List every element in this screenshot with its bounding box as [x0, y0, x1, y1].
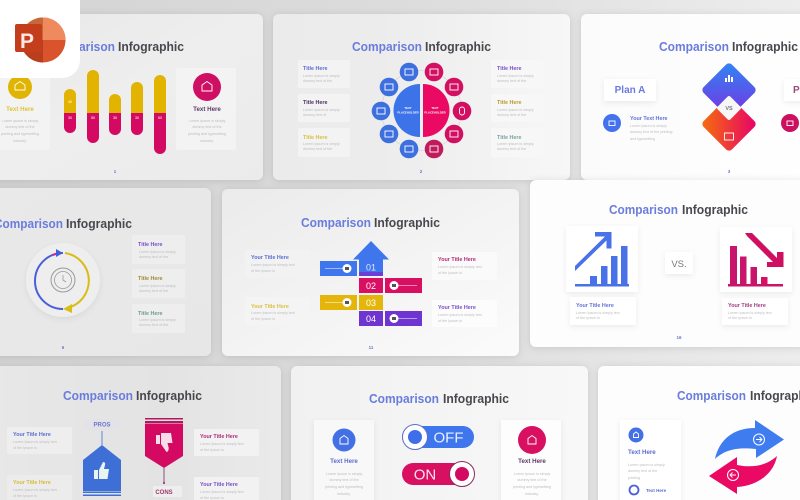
numbered arrow blocks [353, 241, 389, 326]
panel: slide 3 plan A versus plan B: Comparison [659, 39, 729, 54]
right card: Text Here [518, 458, 546, 465]
panel: slide 3 plan A versus plan B [581, 14, 800, 180]
bar chart [64, 70, 166, 154]
left text cards: Title Here [303, 66, 327, 72]
plan A text [603, 114, 672, 141]
left text cards: Your Title Here [13, 480, 51, 486]
central comparison circle: PLACEHOLDER [397, 110, 419, 114]
bar chart: 30 [113, 116, 117, 120]
left card: dummy text of the [329, 478, 359, 482]
bar chart: 30 [68, 116, 72, 120]
left text cards: dummy text of the [303, 147, 332, 151]
numbered arrow blocks: 02 [366, 281, 376, 291]
left text cards: Lorem Ipsum is simply text [251, 263, 295, 267]
central comparison circle: TEXT [404, 106, 412, 110]
left card: industry. [337, 492, 351, 496]
panel: slide on off toggles [291, 366, 588, 500]
side card: Text Here [646, 488, 667, 493]
plan A label [604, 79, 656, 101]
plan A text: and typesetting [630, 137, 655, 141]
left card: printing and typesetting [325, 485, 363, 489]
left card: Text Here [330, 458, 358, 465]
panel: slide pros and cons: Infographic [136, 388, 202, 403]
VS label: VS. [671, 259, 687, 270]
bar chart: 30 [135, 116, 139, 120]
icon: PowerPoint badge: P [20, 30, 34, 53]
caption cards: Your Title Here [576, 303, 614, 309]
central comparison circle [382, 70, 462, 150]
panel: slide 1 bars: 1 [114, 169, 117, 174]
panel: slide 2 circle comparison: Infographic [425, 39, 491, 54]
right text cards: dummy text of the [497, 113, 526, 117]
toggle on: ON [414, 466, 436, 484]
left card: Text Here [6, 106, 34, 113]
left card: dummy text of the [5, 125, 35, 129]
right text cards: of the Ipsum is [438, 319, 462, 323]
plan A label: Plan A [615, 85, 645, 96]
caption cards: of the Ipsum is [576, 316, 600, 320]
toggle off [402, 424, 474, 450]
panel: slide on off toggles: Comparison [369, 391, 439, 406]
left text cards: Lorem Ipsum is simply [303, 108, 340, 112]
text cards: dummy text of the [139, 289, 168, 293]
left text cards: of the Ipsum is [251, 269, 275, 273]
panel: slide 16 growth versus decline [530, 180, 800, 347]
panel: slide 16 growth versus decline: Infographic [682, 202, 748, 217]
right text cards: Lorem Ipsum is simply [497, 142, 534, 146]
right text cards: Lorem Ipsum is simply text [200, 442, 244, 446]
left card [0, 68, 50, 150]
left text cards: Lorem Ipsum is simply text [251, 311, 295, 315]
left card: Lorem Ipsum is simply [2, 119, 38, 123]
left text cards: dummy text of the [303, 79, 332, 83]
panel: slide 1 bars [0, 14, 263, 180]
text cards: Title Here [138, 276, 162, 282]
right card: industry. [525, 492, 539, 496]
text cards: Title Here [138, 242, 162, 248]
right text cards: Lorem Ipsum is simply text [200, 490, 244, 494]
panel: slide 6 clock cycle [0, 188, 211, 356]
bar chart: 60 [158, 116, 162, 120]
panel: slide 11 numbered arrow: Comparison [301, 215, 371, 230]
text cards [132, 235, 185, 333]
text cards: Lorem Ipsum is simply [139, 284, 176, 288]
pros tag [83, 419, 121, 496]
caption cards: Lorem Ipsum is simply text [576, 311, 620, 315]
right text cards: of the Ipsum is [200, 448, 224, 452]
toggle on [402, 462, 474, 486]
panel: slide 11 numbered arrow: Infographic [374, 215, 440, 230]
bar chart: 40 [68, 100, 72, 104]
panel: slide pros and cons [0, 366, 281, 500]
central comparison circle: PLACEHOLDER [424, 110, 446, 114]
plan B label: P [793, 85, 800, 96]
right card: printing and typesetting [513, 485, 551, 489]
left card [314, 420, 374, 500]
panel: slide 3 plan A versus plan B: 3 [728, 169, 731, 174]
text cards: Lorem Ipsum is simply [139, 318, 176, 322]
right text cards: Title Here [497, 66, 521, 72]
caption cards: of the Ipsum is [728, 316, 752, 320]
side card [620, 420, 681, 500]
panel: slide swap arrows [598, 366, 800, 500]
panel: slide swap arrows: Comparison [677, 388, 746, 403]
right card [176, 68, 236, 150]
caption cards: Your Title Here [728, 303, 766, 309]
diamonds: VS [725, 106, 733, 112]
right card: dummy text of the [517, 478, 547, 482]
plan B label [781, 79, 800, 132]
right card: Lorem Ipsum is simply [189, 119, 225, 123]
left text cards: Title Here [303, 100, 327, 106]
left card: printing and typesetting [1, 132, 39, 136]
right text cards: Your Title Here [438, 257, 476, 263]
left text cards: Lorem Ipsum is simply text [13, 488, 57, 492]
right card: printing and typesetting [188, 132, 226, 136]
panel: slide 2 circle comparison: 2 [420, 169, 423, 174]
caption cards: Lorem Ipsum is simply text [728, 311, 772, 315]
panel: slide 6 clock cycle: 6 [62, 345, 65, 350]
panel: slide 2 circle comparison [273, 14, 570, 180]
toggle off: OFF [434, 430, 464, 446]
right text cards [491, 60, 544, 157]
right text cards: Lorem Ipsum is simply text [438, 265, 482, 269]
left text cards: Your Title Here [251, 304, 289, 310]
panel: slide pros and cons: Comparison [63, 388, 133, 403]
panel: slide 1 bars: Comparison [45, 39, 115, 54]
numbered arrow blocks: 03 [366, 298, 376, 308]
right text cards: Lorem Ipsum is simply [497, 108, 534, 112]
side card: Text Here [628, 449, 656, 456]
panel: slide 11 numbered arrow [222, 189, 519, 356]
left card: Lorem Ipsum is simply [326, 472, 362, 476]
panel: slide 6 clock cycle: Infographic [66, 216, 132, 231]
panel: slide 1 bars: Infographic [118, 39, 184, 54]
side card: dummy text of the [628, 469, 657, 473]
left card: industry. [13, 139, 27, 143]
icon: thumbs down [156, 433, 172, 452]
left text cards: Lorem Ipsum is simply [303, 74, 340, 78]
plan A text: Lorem Ipsum is simply [630, 124, 667, 128]
left text cards [298, 60, 350, 157]
icon: PowerPoint badge [0, 0, 80, 78]
diamonds [701, 62, 757, 152]
left text cards: Lorem Ipsum is simply [303, 142, 340, 146]
text cards: Title Here [138, 311, 162, 317]
right text cards: Title Here [497, 135, 521, 141]
numbered arrow blocks: 01 [366, 262, 376, 272]
right text cards: Title Here [497, 100, 521, 106]
right text cards: of the Ipsum is [438, 271, 462, 275]
right card: dummy text of the [192, 125, 222, 129]
left text cards: of the Ipsum is [13, 494, 37, 498]
rising chart card [566, 226, 638, 292]
cons tag [145, 418, 183, 497]
left text cards [245, 250, 310, 325]
left text cards: of the Ipsum is [251, 317, 275, 321]
plan A text: Your Text Here [630, 116, 668, 122]
left text cards: Your Title Here [13, 432, 51, 438]
text cards: dummy text of the [139, 255, 168, 259]
left text cards: Title Here [303, 135, 327, 141]
panel: slide 16 growth versus decline: 16 [676, 335, 682, 340]
panel: slide on off toggles: Infographic [443, 391, 509, 406]
left text cards: Lorem Ipsum is simply text [13, 440, 57, 444]
cycle diagram [26, 243, 100, 317]
left text cards [7, 427, 72, 500]
panel: slide 2 circle comparison: Comparison [352, 39, 422, 54]
right text cards: Your Title Here [438, 305, 476, 311]
panel: slide 16 growth versus decline: Comparison [609, 202, 678, 217]
right card: industry. [200, 139, 214, 143]
side card: Lorem Ipsum is simply [628, 463, 665, 467]
right card: Lorem Ipsum is simply [514, 472, 550, 476]
side card: printing [628, 476, 640, 480]
right text cards: dummy text of the [497, 79, 526, 83]
central comparison circle: TEXT [431, 106, 439, 110]
numbered arrow blocks: 04 [366, 314, 376, 324]
right text cards: Your Title Here [200, 482, 238, 488]
text cards: dummy text of the [139, 323, 168, 327]
falling chart card [720, 227, 792, 292]
left text cards: Your Title Here [251, 255, 289, 261]
left text cards: of the Ipsum is [13, 446, 37, 450]
bar chart: 50 [91, 116, 95, 120]
right card: Text Here [193, 106, 221, 113]
right text cards: dummy text of the [497, 147, 526, 151]
plan A text: dummy text of the printing [630, 130, 672, 134]
icon: thumbs up [94, 462, 109, 479]
right text cards: Lorem Ipsum is simply text [438, 313, 482, 317]
panel: slide 11 numbered arrow: 11 [369, 345, 374, 350]
pros tag: PROS [93, 422, 111, 428]
right text cards [194, 429, 259, 500]
VS label [665, 252, 693, 274]
blue curved arrow [715, 420, 784, 459]
text cards: Lorem Ipsum is simply [139, 250, 176, 254]
right text cards [432, 252, 497, 327]
caption cards [570, 297, 788, 325]
pink icons [425, 63, 471, 158]
blue icons [372, 63, 418, 158]
right text cards: Your Title Here [200, 434, 238, 440]
right text cards: Lorem Ipsum is simply [497, 74, 534, 78]
cons tag: CONS [155, 490, 173, 496]
side tabs [320, 261, 422, 326]
left text cards: dummy text of [303, 113, 327, 117]
right text cards: of the Ipsum is [200, 496, 224, 500]
right card [501, 420, 561, 500]
pink curved arrow [709, 456, 777, 494]
